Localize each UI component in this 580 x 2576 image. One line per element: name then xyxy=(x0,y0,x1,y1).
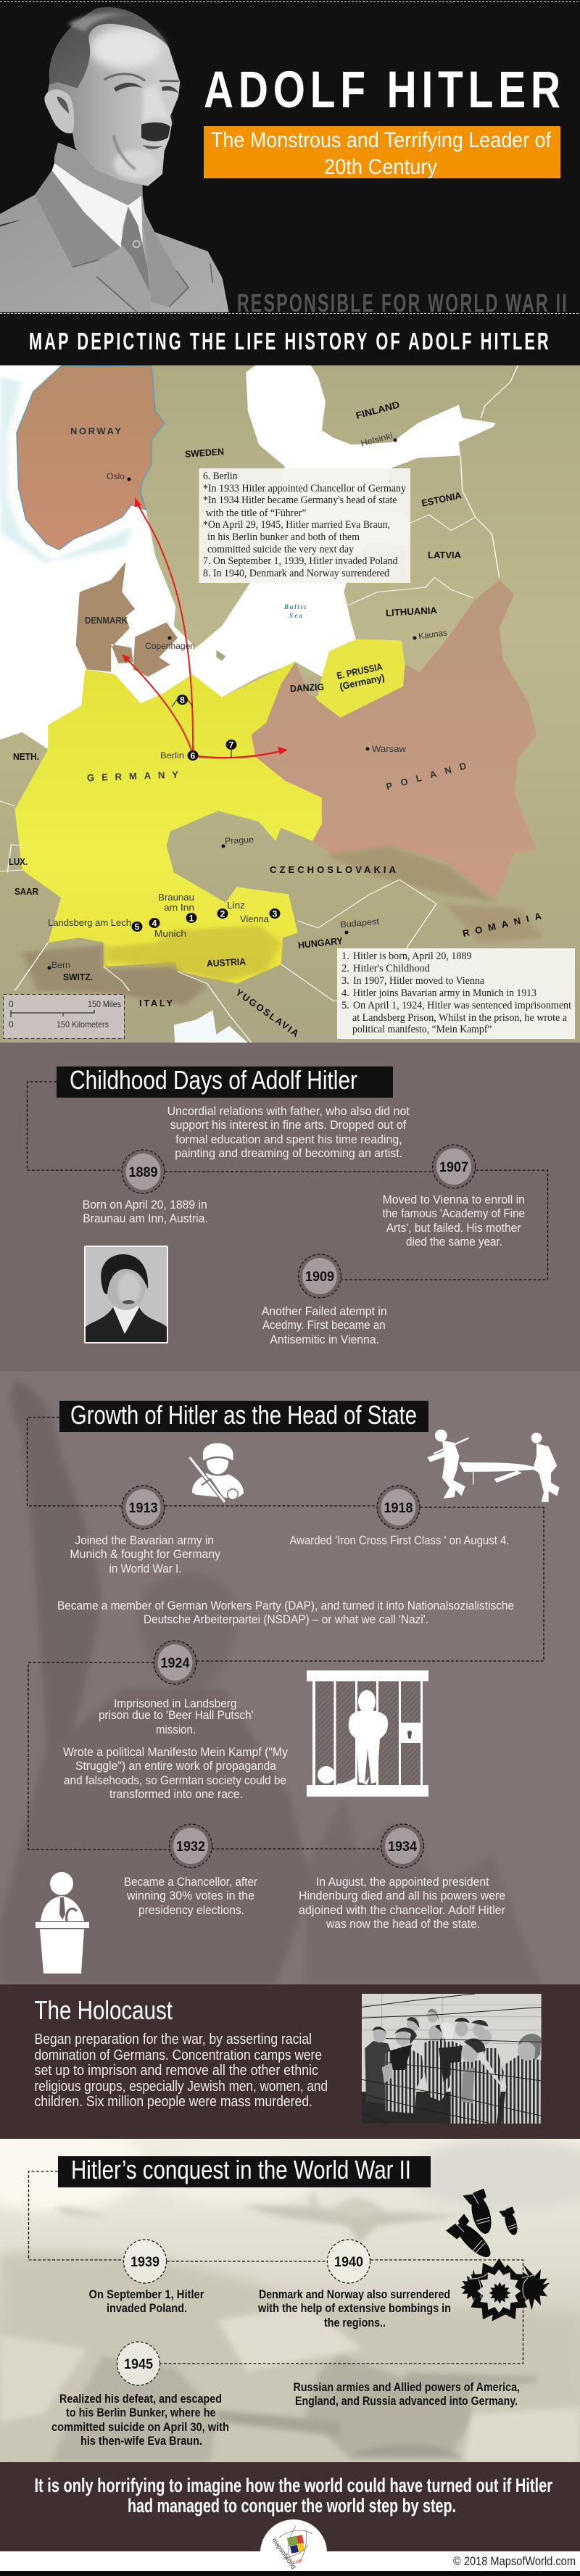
text: moved to Vienna: the famous 'Academy of Fine xyxy=(383,1206,525,1220)
panel: the Holocaust xyxy=(0,1984,580,2139)
text: Allied advance: Russian armies and Allied powers of America, xyxy=(293,2381,520,2394)
map labels: Braunau xyxy=(158,892,194,903)
year badge 1934 xyxy=(381,1824,423,1868)
logo: MapsofWorld: mapsofworld xyxy=(270,2536,297,2570)
map labels: SAAR xyxy=(14,886,39,897)
map labels: FINLAND xyxy=(355,399,401,421)
heading: The Holocaust xyxy=(35,1995,173,2025)
callout: Berlin events: with the title of “Führer” xyxy=(206,508,306,519)
text: Denmark and Norway: with the help of extensive bombings in xyxy=(257,2302,451,2315)
map labels: Vienna xyxy=(240,914,270,924)
terrain shading xyxy=(22,846,544,1006)
map labels: am Inn xyxy=(164,902,194,913)
text block: relations with father xyxy=(167,1104,410,1160)
numbered markers: 4 xyxy=(152,918,157,928)
callout: early life events: 1. xyxy=(341,951,349,962)
callout: early life events: 4. xyxy=(341,987,349,999)
year badge 1909 xyxy=(299,1254,341,1298)
year badge 1913 xyxy=(122,1486,165,1529)
year badge 1940 xyxy=(328,2240,370,2283)
year badge 1907: 1907 xyxy=(439,1160,468,1175)
numbered markers: 7 xyxy=(229,740,234,750)
callout: early life events xyxy=(337,948,575,1039)
map labels: Baltic xyxy=(283,603,307,610)
text: joined army: Munich & fought for Germany xyxy=(70,1547,221,1561)
map labels: YUGOSLAVIA xyxy=(233,987,301,1039)
map labels: Helsinki xyxy=(360,431,394,449)
map labels: HUNGARY xyxy=(297,935,344,951)
text: imprisoned: Imprisoned in Landsberg xyxy=(114,1697,236,1710)
map labels: Bern xyxy=(51,960,70,970)
text: NSDAP: Deutsche Arbeiterpartei (NSDAP) – or what we call 'Nazi'. xyxy=(144,1612,428,1626)
text: Poland: On September 1, Hitler xyxy=(88,2288,204,2301)
callout: early life events: Hitler's Childhood xyxy=(353,963,431,974)
text block: relations with father: painting and dreaming of becoming an artist. xyxy=(175,1146,402,1160)
text: imprisoned: prison due to 'Beer Hall Putsch' xyxy=(99,1708,254,1722)
map labels: Budapest xyxy=(339,916,380,929)
callout: Berlin events: *On April 29, 1945, Hitler married Eva Braun, xyxy=(203,519,390,531)
text: Allied advance: England, and Russia advanced into Germany. xyxy=(295,2395,518,2408)
year badge 1924: 1924 xyxy=(161,1656,190,1671)
icon: stretcher bearers xyxy=(427,1430,560,1502)
tagline: RESPONSIBLE FOR WORLD WAR II xyxy=(237,289,567,318)
text block: Began preparation for the war, by asserting racial xyxy=(35,2032,312,2047)
closing statement panel xyxy=(0,2462,580,2551)
panel: childhood days xyxy=(0,1043,580,1372)
callout: early life events: 5. xyxy=(341,1000,349,1011)
map labels: Sea xyxy=(289,612,303,619)
portrait photo of Adolf Hitler xyxy=(0,7,229,312)
text: moved to Vienna: Arts', but failed. His mother xyxy=(386,1221,521,1235)
title: ADOLF HITLER xyxy=(204,61,560,118)
text: imprisoned: mission. xyxy=(156,1723,196,1736)
year badge 1924 xyxy=(154,1641,196,1684)
childhood photo xyxy=(84,1246,168,1343)
text: joined army: Joined the Bavarian army in xyxy=(75,1533,214,1547)
text: failed attempt xyxy=(262,1304,387,1346)
icon: speaker at podium xyxy=(36,1872,89,1974)
map labels: Prague xyxy=(225,834,254,846)
logo: MapsofWorld xyxy=(260,2519,327,2569)
map labels: SWITZ. xyxy=(63,972,93,982)
text: chancellor: Became a Chancellor, after xyxy=(124,1875,257,1889)
icon: soldier with rifle xyxy=(190,1443,244,1502)
text: moved to Vienna: died the same year. xyxy=(406,1235,502,1248)
text: NSDAP: Became a member of German Workers Party (DAP), and turned it into Nationalsozialistische xyxy=(57,1599,514,1612)
callout: early life events: at Landsberg Prison, Whilst in the prison, he wrote a xyxy=(352,1012,568,1024)
text: Allied advance xyxy=(293,2381,520,2408)
map labels: LUX. xyxy=(9,856,28,867)
scale bar: 150 Kilometers xyxy=(57,1019,109,1030)
text: Mein Kampf: Struggle") an entire work of propaganda xyxy=(75,1759,276,1773)
map labels: Berlin xyxy=(160,750,184,761)
text block: relations with father: support his interest in fine arts. Dropped out of xyxy=(170,1118,406,1132)
city dots xyxy=(48,438,416,970)
map labels: DANZIG xyxy=(290,682,324,694)
callout: early life events: Hitler joins Bavarian army in Munich in 1913 xyxy=(353,987,536,999)
numbered markers: 8 xyxy=(180,695,185,705)
numbered markers: 2 xyxy=(220,909,225,919)
year badge 1939 xyxy=(123,2240,167,2283)
map labels: Copenhagen xyxy=(145,641,195,651)
text: failed attempt: Acedmy. First became an xyxy=(262,1318,386,1332)
year badge 1932 xyxy=(170,1824,212,1868)
year badge 1889 xyxy=(122,1150,165,1193)
text: failed attempt: Another Failed atempt in xyxy=(262,1304,387,1318)
text block: relations with father: Uncordial relations with father, who also did not xyxy=(167,1104,410,1118)
callout: Berlin events: 7. On September 1, 1939, Hitler invaded Poland xyxy=(203,555,398,567)
text: joined army: in World War I. xyxy=(109,1562,181,1575)
year badge 1939: 1939 xyxy=(130,2255,160,2270)
callout: Berlin events: 6. Berlin xyxy=(203,471,238,482)
text block: children. Six million people were mass murdered. xyxy=(35,2094,312,2110)
year badge 1940: 1940 xyxy=(334,2255,363,2270)
panel: conquest in World War II xyxy=(0,2124,580,2462)
year badge 1934: 1934 xyxy=(388,1839,417,1855)
map labels: Warsaw xyxy=(372,744,406,754)
callout: Berlin events: *In 1934 Hitler became Germany's head of state xyxy=(203,494,397,506)
timeline connector xyxy=(28,1082,548,1280)
heading: Hitler’s conquest in the World War II xyxy=(71,2155,411,2184)
callout: early life events: political manifesto, “Mein Kampf” xyxy=(352,1024,492,1035)
photo: children behind barbed wire xyxy=(362,1994,542,2124)
text: Mein Kampf: and falsehoods, so Germtan society could be xyxy=(64,1773,286,1787)
dashed border lines xyxy=(0,1,580,313)
text: joined army xyxy=(70,1533,221,1575)
numbered markers: 6 xyxy=(191,751,196,761)
header panel xyxy=(0,0,580,365)
map labels: Oslo xyxy=(107,471,125,481)
year badge 1932: 1932 xyxy=(176,1839,205,1855)
map labels xyxy=(9,399,543,1039)
background silhouette xyxy=(0,1381,540,1984)
text: chancellor: winning 30% votes in the xyxy=(126,1889,254,1902)
closing statement panel: had managed to conquer the world step by step. xyxy=(128,2495,456,2517)
year badge 1889: 1889 xyxy=(129,1165,158,1180)
text: Denmark and Norway: the regions.. xyxy=(324,2316,386,2329)
text: Hindenburg: In August, the appointed president xyxy=(316,1875,489,1889)
text: Mein Kampf: transformed into one race. xyxy=(109,1787,243,1801)
text: defeat: Realized his defeat, and escaped xyxy=(59,2393,222,2406)
callout: early life events: 2. xyxy=(341,963,349,974)
map labels: Linz xyxy=(227,900,245,911)
arrow heads xyxy=(122,497,288,755)
text block: religious groups, especially Jewish men, women, and xyxy=(35,2079,328,2095)
callout: early life events: 3. xyxy=(341,975,349,987)
scale bar xyxy=(3,995,125,1038)
text: Hindenburg: adjoined with the chancellor. Adolf Hitler xyxy=(299,1903,505,1917)
text: imprisoned xyxy=(99,1697,254,1736)
map labels: ROMANIA xyxy=(462,910,543,939)
callout: early life events: Hitler is born, April 20, 1889 xyxy=(353,951,471,962)
text: Hindenburg: was now the head of the state. xyxy=(326,1917,480,1931)
text: born: Born on April 20, 1889 in xyxy=(83,1198,207,1212)
text: moved to Vienna: Moved to Vienna to enroll in xyxy=(383,1193,525,1206)
map labels: NORWAY xyxy=(70,426,121,436)
year badge 1913: 1913 xyxy=(129,1501,158,1516)
scale bar: 0 xyxy=(9,999,14,1009)
heading: Childhood Days of Adolf Hitler xyxy=(70,1065,357,1095)
map labels: ESTONIA xyxy=(420,489,463,509)
text: Poland xyxy=(88,2288,204,2315)
scale bar: 0 xyxy=(9,1019,14,1030)
logo: MapsofWorld: .com xyxy=(291,2558,303,2566)
text: Denmark and Norway: Denmark and Norway also surrendered xyxy=(259,2288,450,2301)
year badge 1909: 1909 xyxy=(305,1270,334,1285)
callout: early life events: On April 1, 1924, Hitler was sentenced imprisonment xyxy=(353,1000,571,1011)
map heading: MAP DEPICTING THE LIFE HISTORY OF ADOLF HITLER xyxy=(29,328,549,355)
map labels: GERMANY xyxy=(87,769,179,783)
text: chancellor xyxy=(124,1875,257,1917)
panel: growth as head of state xyxy=(0,1372,580,1984)
map labels: POLAND xyxy=(385,761,468,792)
icon: prisoner behind bars xyxy=(307,1670,428,1797)
text: chancellor: presidency elections. xyxy=(138,1903,244,1917)
text: iron cross: Awarded 'Iron Cross First Class ' on August 4. xyxy=(290,1533,509,1547)
timeline connector xyxy=(29,2171,523,2364)
text block: set up to imprison and remove all the other ethnic xyxy=(35,2063,318,2079)
numbered markers: 3 xyxy=(273,909,278,919)
map labels: (Germany) xyxy=(339,672,386,692)
text: Mein Kampf xyxy=(63,1745,288,1801)
year badge 1945: 1945 xyxy=(124,2357,153,2372)
map labels: DENMARK xyxy=(85,615,128,626)
text: Hindenburg xyxy=(299,1875,505,1931)
map labels: NETH. xyxy=(13,751,39,762)
route arrow to Norway xyxy=(125,500,284,758)
text: failed attempt: Antisemitic in Vienna. xyxy=(270,1333,379,1346)
timeline connector xyxy=(28,1417,544,1850)
year badge 1918 xyxy=(377,1486,420,1529)
text: Denmark and Norway xyxy=(257,2288,451,2329)
callout: early life events: In 1907, Hitler moved to Vienna xyxy=(353,975,485,987)
map labels: E. PRUSSIA xyxy=(336,660,384,682)
callout: Berlin events: committed suicide the very next day xyxy=(207,544,355,555)
background: planes and tanks xyxy=(0,2124,580,2462)
year badge 1945 xyxy=(117,2342,160,2385)
callout: Berlin events: 8. In 1940, Denmark and Norway surrendered xyxy=(203,568,390,579)
footer strip xyxy=(0,2551,580,2576)
text: moved to Vienna xyxy=(383,1193,525,1248)
scale bar: 150 Miles xyxy=(88,999,121,1009)
numbered markers: 1 xyxy=(189,914,194,924)
map labels: Kaunas xyxy=(418,627,448,642)
icon: explosion xyxy=(460,2258,550,2322)
text: NSDAP xyxy=(57,1599,514,1626)
subtitle banner xyxy=(204,126,560,179)
text block: domination of Germans. Concentration camps were xyxy=(35,2047,322,2063)
map labels: Landsberg am Lech xyxy=(48,917,131,928)
map labels: CZECHOSLOVAKIA xyxy=(270,864,397,875)
numbered markers: 5 xyxy=(135,922,140,932)
text: Mein Kampf: Wrote a political Manifesto Mein Kampf ("My xyxy=(63,1745,288,1759)
country borders xyxy=(0,365,518,1043)
map labels: LITHUANIA xyxy=(386,605,438,618)
text: born xyxy=(83,1198,208,1225)
text: defeat: committed suicide on April 30, with xyxy=(51,2421,229,2434)
text: defeat xyxy=(51,2393,229,2448)
icon: falling bombs xyxy=(446,2188,520,2262)
text: defeat: his then-wife Eva Braun. xyxy=(80,2435,202,2448)
map labels: AUSTRIA xyxy=(207,956,246,969)
numbered markers xyxy=(132,695,280,932)
map labels: LATVIA xyxy=(428,550,462,560)
map labels: SWEDEN xyxy=(185,446,224,460)
text block: relations with father: formal education and spent his time reading, xyxy=(175,1132,402,1146)
map geography xyxy=(0,365,544,1043)
text block xyxy=(35,2032,328,2110)
text: born: Braunau am Inn, Austria. xyxy=(83,1212,208,1225)
year badge 1918: 1918 xyxy=(384,1501,413,1516)
map labels: Munich xyxy=(154,928,186,939)
text: Poland: invaded Poland. xyxy=(107,2302,187,2315)
heading: Growth of Hitler as the Head of State xyxy=(70,1400,417,1430)
map labels: ITALY xyxy=(139,998,173,1009)
map panel xyxy=(0,365,580,1043)
year badge 1907 xyxy=(432,1145,476,1188)
subtitle banner: 20th Century xyxy=(324,155,437,179)
callout: Berlin events xyxy=(199,468,410,583)
text: defeat: to his Berlin Bunker, where he xyxy=(66,2406,216,2419)
callout: Berlin events: *In 1933 Hitler appointed Chancellor of Germany xyxy=(203,483,407,494)
subtitle banner: The Monstrous and Terrifying Leader of xyxy=(211,128,552,152)
callout: Berlin events: in his Berlin bunker and both of them xyxy=(207,531,360,543)
text: Hindenburg: Hindenburg died and all his powers were xyxy=(299,1889,505,1902)
